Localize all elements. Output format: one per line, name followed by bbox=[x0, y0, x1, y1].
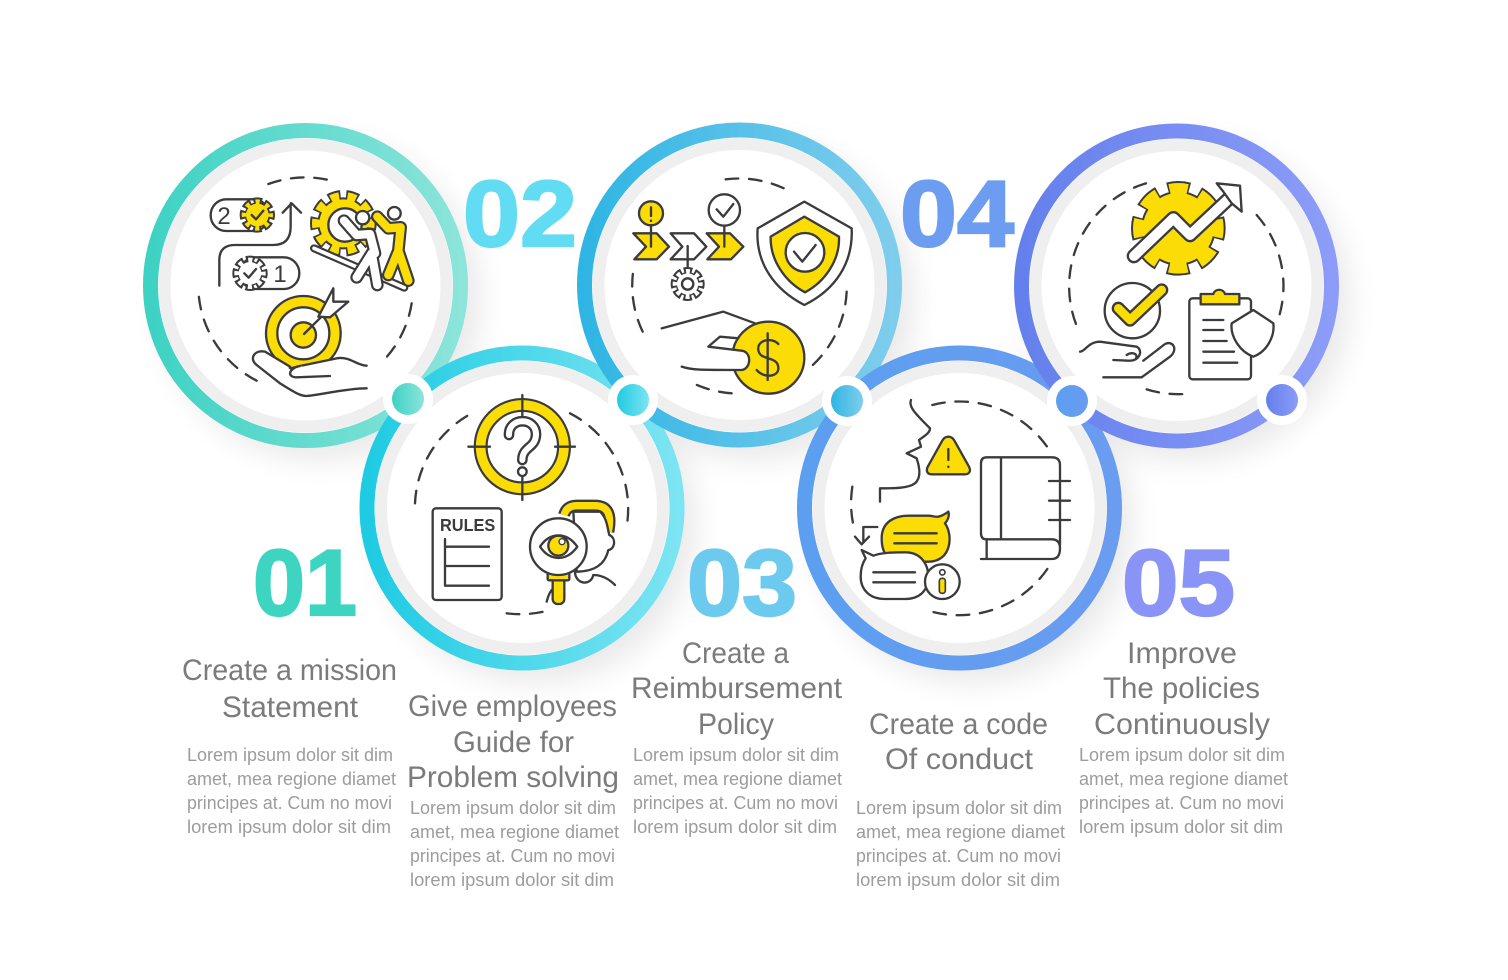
text block: step 3: amet, mea regione diamet bbox=[633, 768, 842, 789]
panel: step 1 circle bbox=[150, 130, 460, 440]
heading: step 1: Create a mission bbox=[182, 654, 397, 687]
number 01: 01 bbox=[253, 530, 357, 635]
icon: pill step 1: 1 bbox=[273, 261, 287, 288]
panel: step 4 circle bbox=[804, 353, 1114, 663]
icon: person with magnifier bbox=[530, 506, 615, 604]
text block: step 1: Lorem ipsum dolor sit dim bbox=[187, 744, 393, 765]
icon group: code of conduct bbox=[851, 400, 1070, 615]
text block: step 2: principes at. Cum no movi bbox=[410, 845, 615, 866]
text block: step 2 bbox=[410, 797, 619, 890]
icon: pill step 2 bbox=[211, 199, 271, 231]
text block: step 5: Lorem ipsum dolor sit dim bbox=[1079, 744, 1285, 765]
icon: check in hand bbox=[1080, 283, 1174, 377]
text block: step 3: lorem ipsum dolor sit dim bbox=[633, 816, 837, 837]
icon: pill step 1 bbox=[237, 257, 299, 289]
text block: step 2: amet, mea regione diamet bbox=[410, 821, 619, 842]
icon: pill step 2: 2 bbox=[217, 203, 231, 230]
text block: step 2: Lorem ipsum dolor sit dim bbox=[410, 797, 616, 818]
dashed arc bbox=[851, 401, 1049, 615]
icon: warning triangle bbox=[927, 437, 970, 474]
arrow bbox=[219, 203, 301, 286]
connector node 2 bbox=[608, 375, 658, 425]
text block: step 2: lorem ipsum dolor sit dim bbox=[410, 869, 614, 890]
heading: step 2: Give employees bbox=[408, 690, 617, 723]
icon: rules document: RULES bbox=[440, 515, 495, 535]
dashed arc bbox=[198, 177, 412, 381]
heading: step 2: Guide for bbox=[453, 726, 574, 759]
icon group: reimbursement bbox=[632, 179, 852, 394]
text block: step 5: lorem ipsum dolor sit dim bbox=[1079, 816, 1283, 837]
soft drop shadows bbox=[160, 140, 1350, 683]
icon: gear with rising arrow bbox=[1134, 183, 1242, 268]
icon: target bbox=[266, 288, 348, 371]
icon: process chevrons bbox=[633, 194, 743, 297]
heading: step 3: Create a bbox=[682, 637, 789, 670]
icon group: improve policies bbox=[1069, 183, 1283, 394]
panel: step 5 circle bbox=[1022, 131, 1332, 441]
icon: question target bbox=[468, 395, 575, 500]
heading: step 5 bbox=[1094, 637, 1270, 741]
icon group: mission statement bbox=[198, 177, 412, 396]
dashed arc bbox=[632, 179, 847, 393]
text block: step 5: principes at. Cum no movi bbox=[1079, 792, 1284, 813]
heading: step 4: Of conduct bbox=[885, 743, 1034, 776]
heading: step 5: Continuously bbox=[1094, 708, 1270, 741]
icon: white person bbox=[344, 211, 377, 285]
heading: step 5: The policies bbox=[1103, 672, 1260, 705]
text block: step 4: amet, mea regione diamet bbox=[856, 821, 1065, 842]
icon: speech bubbles bbox=[855, 512, 960, 599]
number 04: 04 bbox=[900, 161, 1014, 266]
connector node 1 bbox=[383, 374, 433, 424]
connector node 3 bbox=[822, 376, 872, 426]
text block: step 3: principes at. Cum no movi bbox=[633, 792, 838, 813]
connector node 4 bbox=[1047, 376, 1097, 426]
heading: step 5: Improve bbox=[1127, 637, 1237, 670]
heading: step 2: Problem solving bbox=[407, 761, 619, 794]
text block: step 3: Lorem ipsum dolor sit dim bbox=[633, 744, 839, 765]
icon: rules document bbox=[433, 508, 502, 600]
icon: shield bbox=[757, 202, 852, 305]
icon: face profile bbox=[880, 400, 930, 502]
number 05: 05 bbox=[1122, 530, 1235, 635]
heading: step 3: Reimbursement bbox=[631, 672, 843, 705]
dashed arc bbox=[415, 413, 628, 614]
heading: step 3: Policy bbox=[698, 708, 774, 741]
icon: hand bbox=[253, 351, 367, 396]
icon: clipboard with shield bbox=[1189, 290, 1274, 379]
heading: step 1 bbox=[182, 654, 397, 724]
panel: step 3 circle bbox=[584, 130, 894, 440]
text block: step 4 bbox=[856, 797, 1065, 890]
icon: big gear bbox=[316, 196, 371, 251]
heading: step 2 bbox=[407, 690, 619, 794]
text block: step 1 bbox=[187, 744, 396, 837]
icon: lever bar bbox=[314, 248, 404, 288]
heading: step 1: Statement bbox=[222, 691, 359, 724]
text block: step 4: principes at. Cum no movi bbox=[856, 845, 1061, 866]
icon: coin in hand bbox=[662, 312, 804, 394]
icon: book bbox=[981, 457, 1070, 559]
number 02: 02 bbox=[463, 161, 577, 266]
text block: step 1: lorem ipsum dolor sit dim bbox=[187, 816, 391, 837]
connector node 5 bbox=[1257, 375, 1307, 425]
icon: yellow person bbox=[377, 207, 408, 281]
panel: step 2 circle bbox=[367, 353, 677, 663]
dashed arc bbox=[1069, 183, 1283, 394]
heading: step 4: Create a code bbox=[869, 708, 1048, 741]
heading: step 3 bbox=[631, 637, 843, 741]
text block: step 3 bbox=[633, 744, 842, 837]
text block: step 4: lorem ipsum dolor sit dim bbox=[856, 869, 1060, 890]
text block: step 1: amet, mea regione diamet bbox=[187, 768, 396, 789]
text block: step 4: Lorem ipsum dolor sit dim bbox=[856, 797, 1062, 818]
text block: step 5: amet, mea regione diamet bbox=[1079, 768, 1288, 789]
text block: step 1: principes at. Cum no movi bbox=[187, 792, 392, 813]
text block: step 5 bbox=[1079, 744, 1288, 837]
icon group: employee guide bbox=[415, 395, 628, 614]
number 03: 03 bbox=[687, 530, 797, 635]
heading: step 4 bbox=[869, 708, 1048, 776]
